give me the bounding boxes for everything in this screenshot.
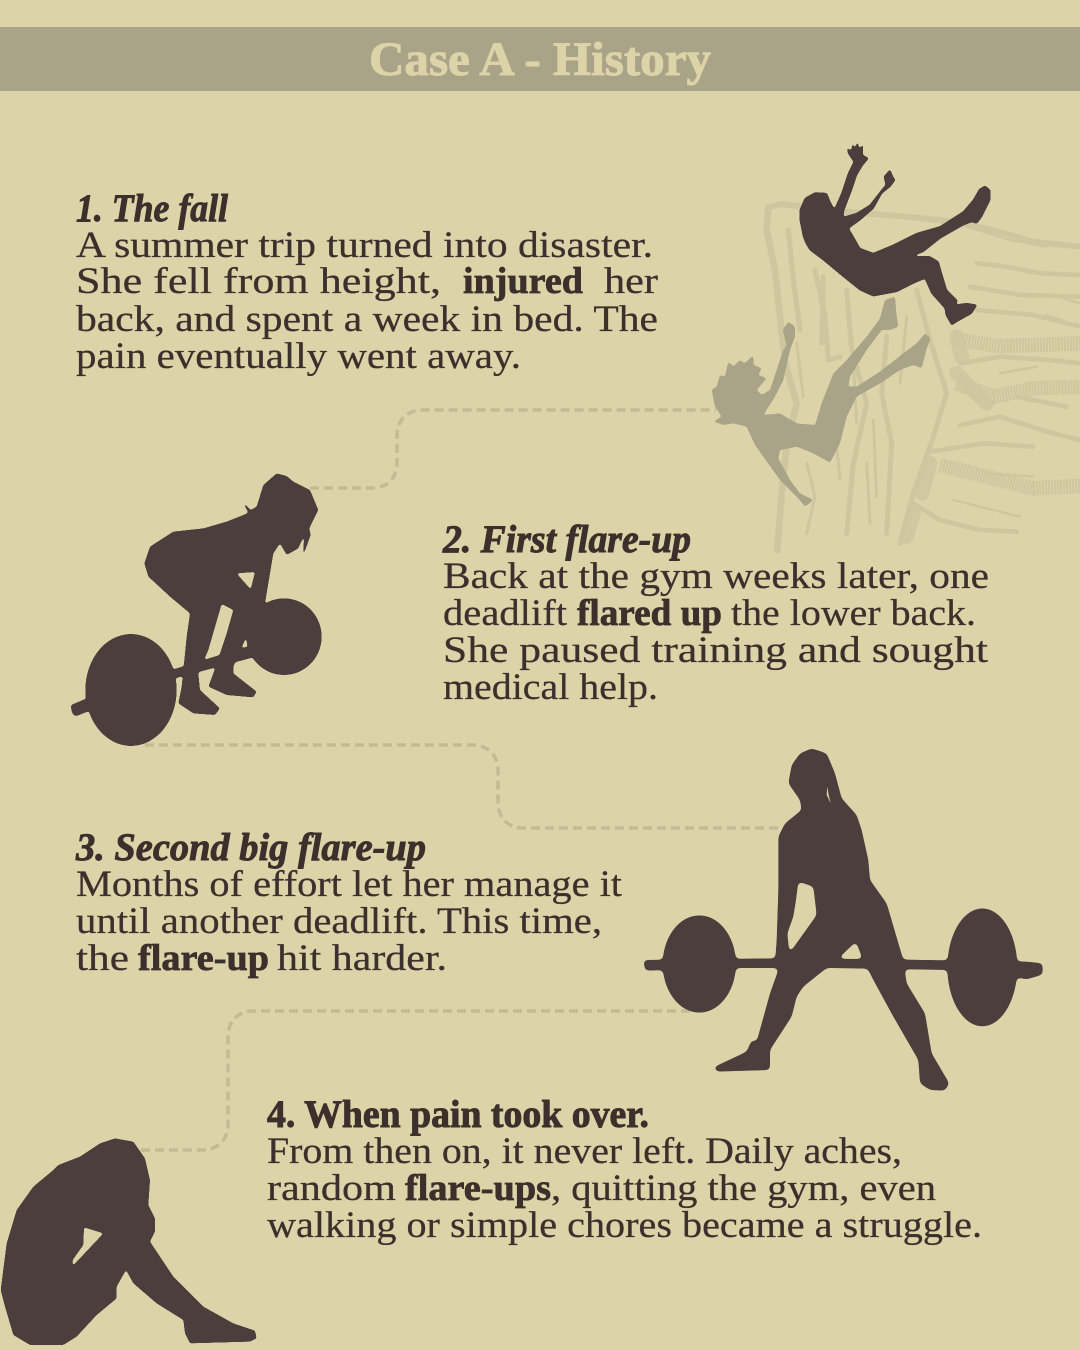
text block: step 4 when pain took over: walking or simple chores became a struggle. <box>267 1205 982 1246</box>
text block: step 2 first flare-up: She paused training and sought <box>443 630 989 671</box>
text block: step 4 when pain took over: , quitting the gym, even <box>551 1168 936 1209</box>
text block: step 1 the fall: injured <box>463 261 583 302</box>
title band: Case A - History <box>369 33 711 86</box>
text block: step 1 the fall: 1. The fall <box>76 187 228 230</box>
text block: step 2 first flare-up: Back at the gym weeks later, one <box>443 556 989 597</box>
text block: step 3 second big flare-up: Months of effort let her manage it <box>76 864 623 905</box>
dashed connector: step 1 to 2 <box>310 410 716 488</box>
text block: step 2 first flare-up <box>442 518 989 708</box>
text block: step 4 when pain took over <box>267 1093 982 1246</box>
text block: step 3 second big flare-up: 3. Second big flare-up <box>75 826 426 869</box>
text block: step 3 second big flare-up: flare-up <box>138 938 269 979</box>
icon: woman lifting barbell <box>643 748 1043 1091</box>
icon: falling woman <box>800 143 990 325</box>
text block: step 3 second big flare-up: the <box>76 938 129 979</box>
text block: step 1 the fall: pain eventually went away. <box>76 336 521 377</box>
text block: step 4 when pain took over: From then on, it never left. Daily aches, <box>267 1131 902 1172</box>
text block: step 2 first flare-up: the lower back. <box>731 593 976 634</box>
text block: step 3 second big flare-up: until another deadlift. This time, <box>76 901 602 942</box>
illustration: cliff <box>767 204 1080 550</box>
title band <box>0 27 1080 91</box>
text block: step 2 first flare-up: 2. First flare-up <box>442 518 691 561</box>
text block: step 4 when pain took over: flare-ups <box>405 1168 551 1209</box>
text block: step 4 when pain took over: random <box>267 1168 396 1209</box>
icon: shadow of falling woman <box>712 297 931 507</box>
text block: step 2 first flare-up: deadlift <box>443 593 568 634</box>
text block: step 3 second big flare-up <box>75 826 623 979</box>
text block: step 1 the fall: her <box>604 261 658 302</box>
text block: step 1 the fall: A summer trip turned into disaster. <box>76 225 653 266</box>
dashed connector: step 3 to 4 <box>140 1011 690 1150</box>
icon: woman bending to deadlift <box>71 473 322 746</box>
text block: step 1 the fall: back, and spent a week in bed. The <box>76 299 658 340</box>
text block: step 2 first flare-up: flared up <box>577 593 722 634</box>
icon: woman sitting with head on knees <box>1 1138 257 1345</box>
text block: step 1 the fall <box>76 187 658 377</box>
text block: step 2 first flare-up: medical help. <box>443 667 658 708</box>
text block: step 3 second big flare-up: hit harder. <box>277 938 447 979</box>
text block: step 4 when pain took over: 4. When pain took over. <box>267 1093 649 1136</box>
text block: step 1 the fall: She fell from height, <box>76 261 441 302</box>
dashed connector: step 2 to 3 <box>145 745 785 828</box>
